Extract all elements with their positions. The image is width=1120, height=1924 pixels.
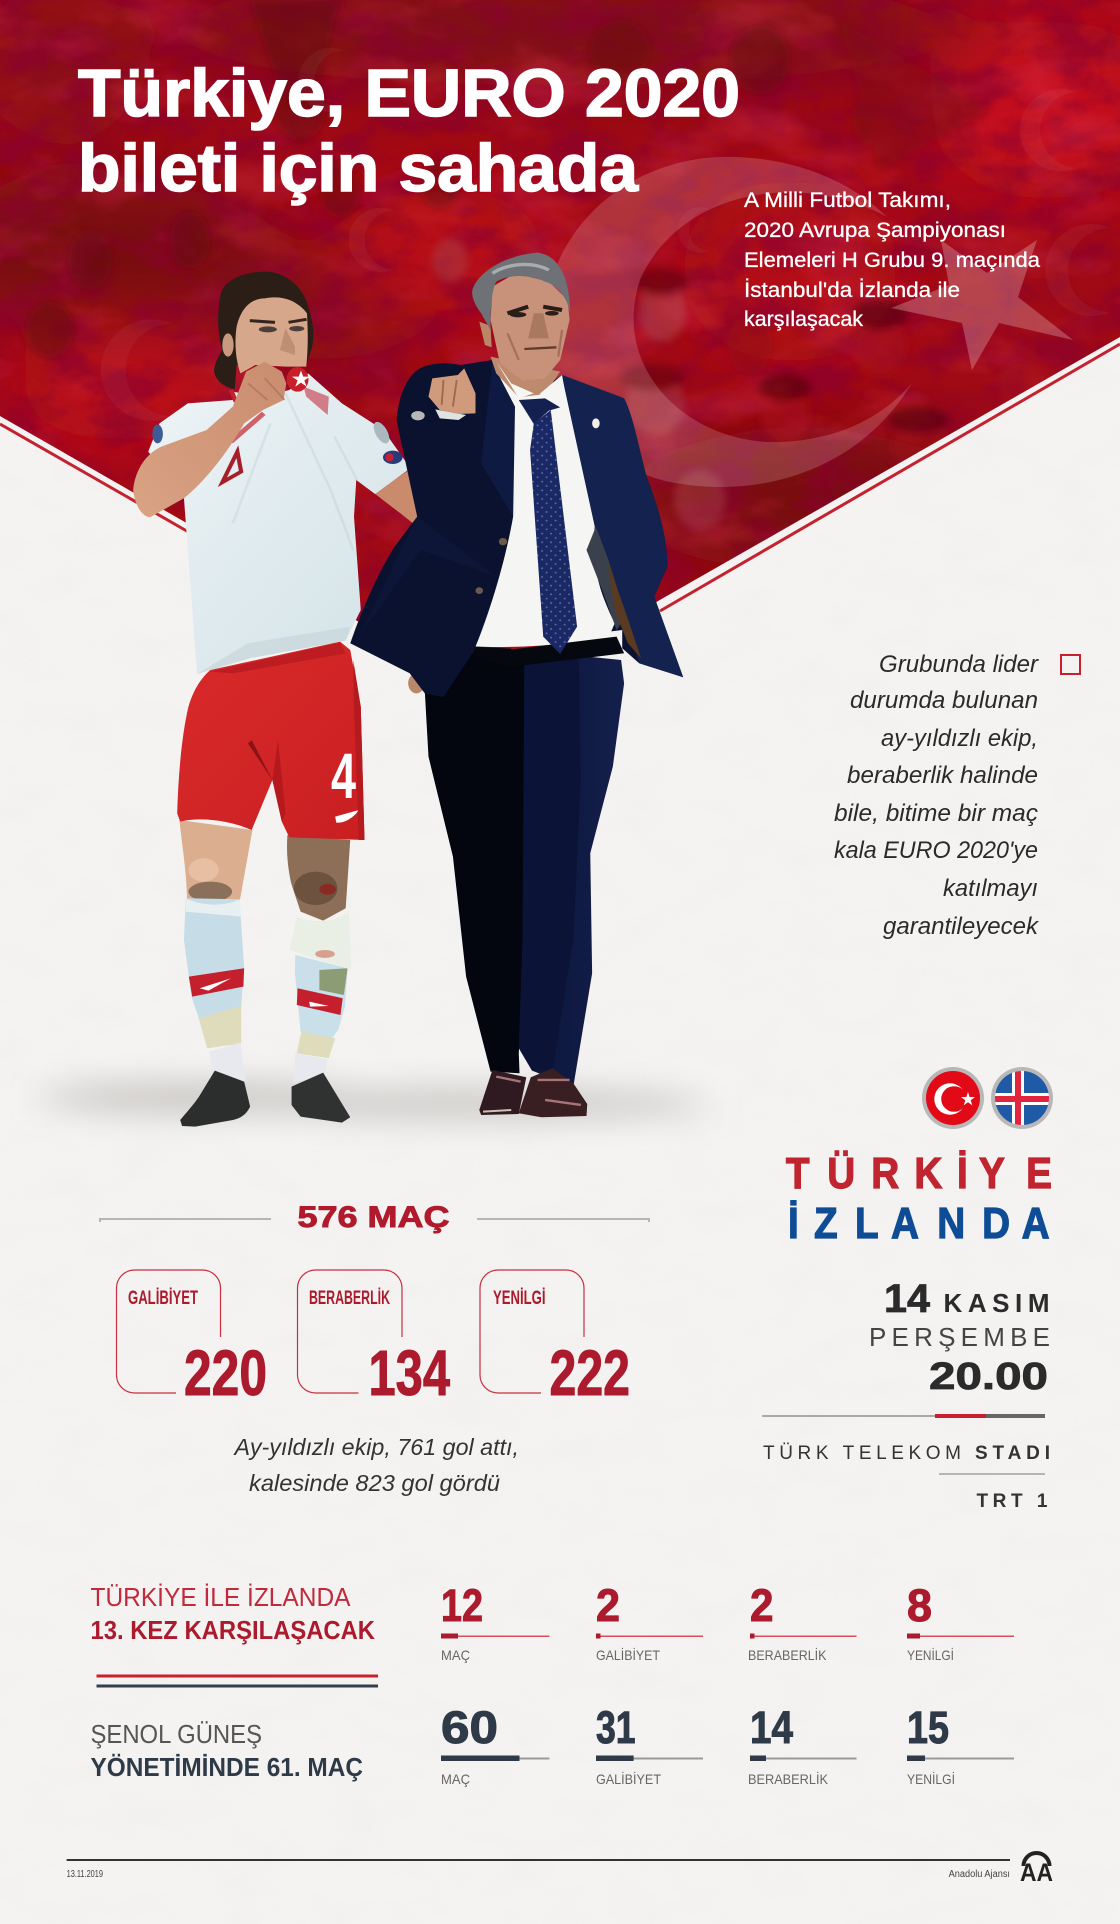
icon: Turkish flag (922, 1067, 984, 1129)
figure: footballer (133, 272, 418, 1127)
stat: draws (748, 1580, 856, 1663)
match record heading (100, 1201, 649, 1234)
icon: agency logo: AA (1020, 1859, 1053, 1887)
shorts number: 4 (331, 740, 356, 812)
title (78, 56, 740, 206)
match venue: STADI (975, 1443, 1050, 1464)
large translucent star (891, 240, 1073, 370)
stat: matches: 60 (441, 1702, 498, 1753)
heading: head to head: TÜRKİYE İLE İZLANDA (90, 1582, 351, 1612)
stat: losses: 8 (907, 1580, 932, 1631)
heading: coach record: YÖNETİMİNDE 61. MAÇ (90, 1752, 363, 1782)
player torso, arms and head (133, 272, 418, 674)
stat card: wins: 220 (184, 1337, 267, 1409)
italic callout: beraberlik halinde (847, 762, 1038, 789)
italic callout: bile, bitime bir maç (834, 800, 1038, 827)
icon: Icelandic flag (990, 1066, 1054, 1130)
italic callout (834, 651, 1040, 940)
coach stats (441, 1702, 1014, 1787)
stat card: draws (298, 1270, 450, 1409)
stat card: losses: YENİLGİ (493, 1288, 546, 1309)
intro text: karşılaşacak (744, 308, 864, 331)
coach trousers and shoes (408, 650, 624, 1117)
stat: wins (596, 1580, 703, 1663)
date: 13.11.2019 (67, 1869, 103, 1880)
stat card: wins (116, 1270, 267, 1409)
stat card: draws: 134 (368, 1337, 450, 1409)
dark and bright colour zones (0, 0, 1120, 570)
small flag crescents (101, 48, 1110, 421)
italic callout: katılmayı (943, 875, 1038, 902)
intro text: Elemeleri H Grubu 9. maçında (744, 249, 1040, 272)
match heading: Türkiye: TÜRKİYE (786, 1148, 1052, 1198)
stat: matches: 12 (441, 1580, 483, 1631)
match date: KASIM (944, 1288, 1050, 1318)
stat: losses: YENİLGİ (907, 1770, 955, 1787)
stat: draws: 14 (750, 1702, 793, 1753)
stat: losses (907, 1702, 1014, 1787)
goals note: kalesinde 823 gol gördü (249, 1470, 500, 1496)
venue divider (939, 1473, 1045, 1475)
stat: draws: BERABERLİK (748, 1770, 829, 1787)
stat: matches: MAÇ (441, 1771, 470, 1787)
stat: wins (596, 1702, 703, 1787)
stat: losses (907, 1580, 1014, 1663)
crowd silhouettes (26, 0, 1042, 530)
stat: wins: 31 (596, 1702, 636, 1753)
stat: draws: BERABERLİK (748, 1646, 827, 1663)
stat: wins: GALİBİYET (596, 1646, 660, 1663)
italic callout: Grubunda lider (879, 651, 1039, 678)
match date (869, 1277, 1050, 1398)
intro text (744, 189, 1040, 331)
player legs and kit, lower body (177, 642, 365, 1127)
italic callout: durumda bulunan (850, 687, 1038, 714)
intro text: A Milli Futbol Takımı, (744, 189, 951, 212)
diagonal red accent lines (0, 344, 1120, 611)
stat card: losses: 222 (550, 1337, 630, 1409)
section divider (96, 1674, 378, 1688)
heading: coach record (90, 1719, 363, 1782)
goals note (232, 1434, 519, 1496)
match heading: İzlanda: İZLANDA (788, 1198, 1050, 1248)
match record heading: 576 MAÇ (298, 1201, 450, 1234)
match date: PERŞEMBE (869, 1322, 1050, 1352)
match venue: TÜRK TELEKOM (763, 1443, 961, 1464)
figure: coach (350, 253, 683, 1117)
callout marker (1061, 655, 1080, 674)
stat: matches: MAÇ (441, 1647, 470, 1663)
intro text: 2020 Avrupa Şampiyonası (744, 219, 1006, 242)
stat: draws (748, 1702, 856, 1787)
ground shadow (40, 1084, 710, 1118)
agency name: Anadolu Ajansı (949, 1869, 1010, 1880)
broadcaster: TRT 1 (976, 1491, 1048, 1512)
title: bileti için sahada (78, 131, 639, 206)
heading: coach record: ŞENOL GÜNEŞ (90, 1719, 262, 1749)
heading: head to head: 13. KEZ KARŞILAŞACAK (90, 1615, 375, 1645)
title: Türkiye, EURO 2020 (78, 56, 740, 131)
large translucent crescent (545, 157, 912, 487)
italic callout: garantileyecek (883, 913, 1040, 940)
stat card: draws: BERABERLİK (309, 1288, 390, 1309)
stat: wins: 2 (596, 1580, 620, 1631)
match divider (762, 1414, 1045, 1418)
footer (67, 1853, 1053, 1887)
intro text: İstanbul'da İzlanda ile (744, 279, 960, 302)
stat card: losses (480, 1270, 630, 1409)
stat: wins: GALİBİYET (596, 1770, 661, 1787)
match date: 20.00 (929, 1356, 1048, 1398)
italic callout: ay-yıldızlı ekip, (881, 725, 1038, 752)
goals note: Ay-yıldızlı ekip, 761 gol attı, (232, 1434, 519, 1460)
red hero banner with crowd and flag (0, 0, 1120, 720)
stat: matches (441, 1580, 549, 1663)
stat card: wins: GALİBİYET (128, 1288, 198, 1309)
stat: losses: YENİLGİ (907, 1646, 954, 1663)
italic callout: kala EURO 2020'ye (834, 837, 1038, 864)
stat: draws: 2 (750, 1580, 774, 1631)
head to head stats (441, 1580, 1014, 1663)
match venue (763, 1443, 1050, 1464)
heading: head to head (90, 1582, 375, 1645)
stat: losses: 15 (907, 1702, 949, 1753)
match date: 14 (884, 1277, 931, 1321)
stat: matches (441, 1702, 549, 1787)
coach jacket, shirt, tie and head (350, 253, 683, 697)
